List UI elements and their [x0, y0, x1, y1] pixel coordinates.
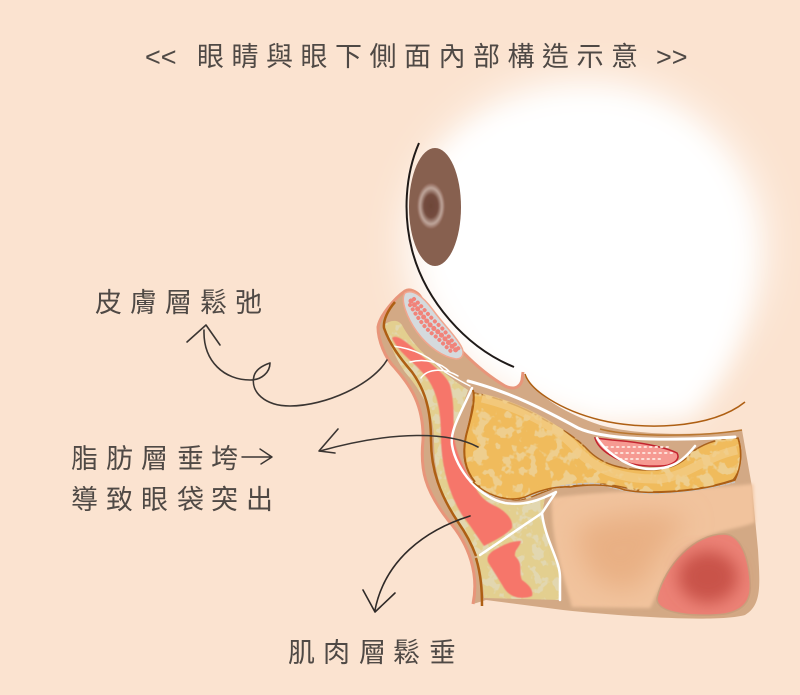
title: >> — [656, 42, 688, 72]
white fascia lines — [392, 346, 735, 600]
brown skin lines — [384, 302, 745, 606]
red fat core speckle — [606, 447, 672, 459]
cheek bone area — [552, 484, 755, 608]
fat pad light rim — [482, 398, 737, 479]
outer tissue — [378, 290, 759, 619]
eye surface line — [407, 143, 514, 367]
icon: iris and pupil — [409, 148, 461, 266]
yellow tissue layer — [384, 321, 561, 600]
label: muscle laxity: 肌肉層鬆垂 — [288, 638, 456, 668]
eyelid line — [525, 374, 745, 426]
anatomy cross-section — [378, 290, 759, 619]
label: skin laxity: 皮膚層鬆弛 — [95, 288, 262, 318]
red fat core — [595, 438, 678, 466]
muscle layer — [392, 337, 532, 598]
conjunctiva — [403, 292, 463, 359]
eyeball glow — [407, 80, 763, 420]
title: 眼睛與眼下側面內部構造示意 — [197, 42, 638, 72]
arrow: fat layer — [319, 429, 478, 453]
fat pad — [464, 393, 741, 500]
title: << — [145, 42, 177, 72]
label: fat layer sagging: 脂肪層垂垮 — [71, 444, 238, 474]
lower lid line — [600, 429, 742, 435]
arrow: muscle layer — [363, 516, 470, 612]
arrow: inline text arrow — [242, 449, 272, 464]
fat pad lower lining — [470, 482, 735, 499]
label: causes eye bags: 導致眼袋突出 — [71, 485, 273, 515]
conjunctiva glands — [410, 299, 459, 353]
salmon skin rim — [378, 290, 523, 604]
cheek muscle — [657, 534, 750, 615]
arrow: skin laxity — [187, 325, 387, 406]
